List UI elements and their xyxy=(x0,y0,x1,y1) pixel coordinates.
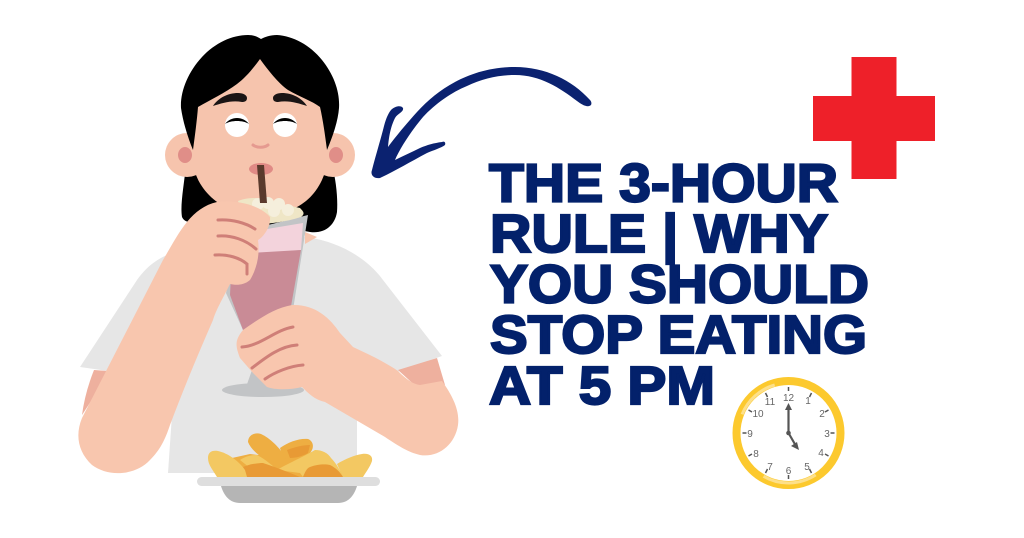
finger lines xyxy=(215,220,256,274)
clock numerals xyxy=(747,393,830,477)
mouth xyxy=(249,163,273,175)
clock numerals: 6 xyxy=(786,466,792,477)
top hair xyxy=(181,35,339,150)
title: YOU SHOULD xyxy=(490,254,869,314)
illustration: woman drinking a milkshake xyxy=(78,35,458,503)
title: STOP EATING xyxy=(490,305,867,365)
clock numerals: 2 xyxy=(819,409,825,420)
clock numerals: 9 xyxy=(747,429,753,440)
eye: left xyxy=(225,113,249,137)
eyebrow: right xyxy=(273,93,307,106)
arrow xyxy=(371,67,591,178)
milkshake xyxy=(230,250,301,330)
glass base xyxy=(222,383,304,397)
left upper arm shadow xyxy=(82,370,108,415)
rim xyxy=(197,477,380,486)
arm xyxy=(237,305,458,455)
title: THE 3-HOUR xyxy=(489,154,838,214)
lower hand and arm xyxy=(237,305,458,455)
ear: right xyxy=(311,133,355,177)
straw xyxy=(257,165,267,203)
neck xyxy=(305,232,317,244)
clock face xyxy=(736,381,840,485)
clock hands xyxy=(785,403,799,450)
title xyxy=(489,154,869,416)
clock ticks xyxy=(742,387,834,479)
dark upper arm xyxy=(398,358,445,390)
clock numerals: 7 xyxy=(767,462,773,473)
glass stem xyxy=(245,370,280,390)
plate of chips xyxy=(197,433,380,503)
raised arm and hand xyxy=(78,201,270,473)
clock numerals: 10 xyxy=(752,409,764,420)
clock numerals: 1 xyxy=(805,396,811,407)
milkshake top xyxy=(255,223,303,254)
title: RULE | WHY xyxy=(490,204,828,265)
chips xyxy=(208,433,372,477)
clock numerals: 4 xyxy=(818,448,824,459)
eye: right xyxy=(273,113,297,137)
eyebrow: left xyxy=(213,93,247,106)
bowl xyxy=(221,486,357,503)
whipped cream xyxy=(238,197,304,224)
glass xyxy=(222,165,308,397)
back hair xyxy=(181,165,337,232)
clock numerals: 11 xyxy=(765,397,776,408)
face xyxy=(195,55,326,213)
finger lines xyxy=(242,327,303,379)
title: AT 5 PM xyxy=(489,356,715,416)
ear: left xyxy=(165,133,209,177)
clock numerals: 5 xyxy=(804,462,810,473)
shirt xyxy=(80,237,442,473)
clock icon xyxy=(736,381,840,485)
nose xyxy=(253,145,268,147)
forearm xyxy=(78,201,270,473)
clock numerals: 8 xyxy=(753,449,759,460)
clock ring highlights xyxy=(742,385,816,483)
clock numerals: 3 xyxy=(824,429,830,440)
red cross xyxy=(813,57,935,179)
glass body xyxy=(226,215,308,330)
clock numerals: 12 xyxy=(783,393,794,404)
